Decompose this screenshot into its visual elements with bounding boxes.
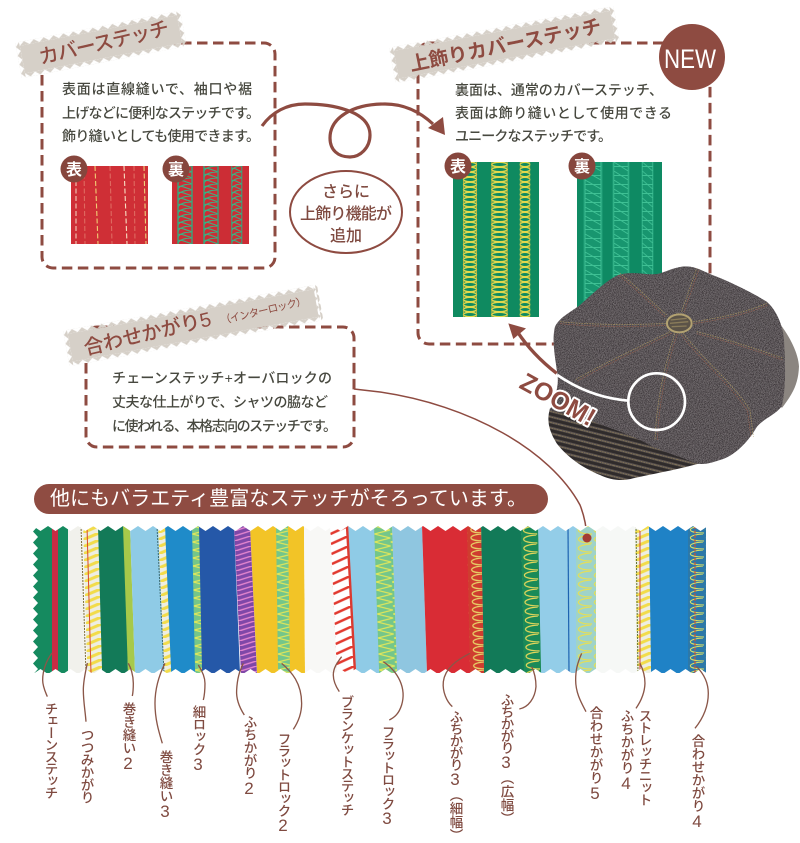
stitch labels: ふちかがり 3 （広幅） xyxy=(496,693,516,824)
description text: 飾り縫いとしても使用できます。 xyxy=(62,128,260,144)
stitch labels xyxy=(42,693,706,842)
panel border xyxy=(42,43,275,268)
zoom arrow xyxy=(508,323,557,373)
heading banner: decorative cover stitch xyxy=(389,6,620,83)
badge: back xyxy=(568,152,596,180)
stitch labels: フラットロック 3 xyxy=(378,725,396,826)
zoom indicator xyxy=(508,323,685,432)
panel: interlock stitch xyxy=(63,285,354,447)
badge: front: 表 xyxy=(66,161,82,179)
swatch: back xyxy=(577,162,662,317)
hat seams xyxy=(560,268,783,440)
pinked edges xyxy=(30,526,710,674)
stitch labels: 巻き縫い 3 xyxy=(156,749,174,820)
panel border xyxy=(86,327,354,447)
stitch labels: ふちかがり 4 xyxy=(616,709,636,792)
stitch labels: つつみかがり xyxy=(78,728,94,804)
callout: additional function: さらに xyxy=(322,183,370,201)
description text: 裏面は、通常のカバーステッチ、 xyxy=(455,82,663,98)
description text xyxy=(62,81,260,144)
description text: チェーンステッチ+オーバロックの xyxy=(112,370,332,386)
marker dot xyxy=(582,534,592,542)
stitch labels: フラットロック 2 xyxy=(274,732,292,834)
heading banner: interlock stitch xyxy=(63,285,323,366)
badge: back xyxy=(162,156,190,182)
stitch labels: チェーンステッチ xyxy=(42,702,58,800)
heading banner: cover stitch xyxy=(15,11,187,78)
description text: 表面は飾り縫いとして使用できる xyxy=(455,105,672,121)
description text xyxy=(112,370,337,434)
fabric panels xyxy=(33,526,706,673)
connector from panel to fabric sample xyxy=(354,389,587,538)
hat button xyxy=(667,314,692,332)
heading banner: cover stitch: カバーステッチ xyxy=(37,18,171,69)
swatch: front xyxy=(71,166,148,244)
heading banner: decorative cover stitch: 上飾りカバーステッチ xyxy=(408,15,603,76)
stitch labels: ふちかがり 3 （細幅） xyxy=(446,710,464,842)
swatch: front xyxy=(453,162,539,317)
section heading pill: 他にもバラエティ豊富なステッチがそろっています。 xyxy=(50,487,527,510)
badge: back: 裏 xyxy=(574,157,590,176)
heading banner: interlock stitch: （インターロック） xyxy=(219,295,308,327)
description text: 表面は直線縫いで、袖口や裾 xyxy=(62,81,252,97)
badge: front xyxy=(60,156,88,182)
heading banner: interlock stitch: 合わせかがり5 xyxy=(82,308,213,360)
stitch labels: 合わせかがり 5 xyxy=(586,706,604,802)
label leader lines, left group xyxy=(43,653,403,743)
description text: ユニークなステッチです。 xyxy=(455,128,612,144)
stitch labels: ストレッチニット xyxy=(636,709,652,806)
stitch rows xyxy=(52,526,706,673)
stitch labels: 合わせかがり 4 xyxy=(688,734,706,830)
hat brim xyxy=(548,408,717,480)
zoom label: ZOOM! xyxy=(515,368,600,432)
hat photo xyxy=(548,266,799,480)
callout: additional function: 上飾り機能が xyxy=(300,204,392,223)
description text: 丈夫な仕上がりで、シャツの脇など xyxy=(112,394,328,410)
swatch: back xyxy=(172,166,249,244)
panel: decorative cover stitch xyxy=(389,6,725,344)
badge: front xyxy=(444,152,472,180)
hat crown xyxy=(550,266,785,464)
badge: front: 表 xyxy=(450,158,466,176)
stitch labels: ふちかがり 2 xyxy=(240,715,258,797)
label leader lines, right group xyxy=(443,653,708,728)
description text: に使われる、本格志向のステッチです。 xyxy=(112,418,337,434)
fabric sample strip xyxy=(30,526,710,674)
description text xyxy=(455,82,672,144)
zoom ring and pointer xyxy=(557,373,685,430)
badge: NEW: NEW xyxy=(664,44,716,74)
callout: additional function: 追加 xyxy=(330,227,362,245)
stitch labels: 細ロック 3 xyxy=(188,704,208,773)
stitch labels: 巻き縫い 2 xyxy=(118,701,138,772)
badge: back: 裏 xyxy=(168,160,184,179)
panel: cover stitch xyxy=(15,11,275,268)
panel border xyxy=(418,43,710,344)
badge: NEW xyxy=(659,24,725,90)
hat side xyxy=(778,322,799,408)
callout: additional function xyxy=(290,171,402,253)
stitch labels: ブランケットステッチ xyxy=(338,695,354,817)
looping arrow xyxy=(262,104,445,157)
description text: 上げなどに便利なステッチです。 xyxy=(62,105,260,121)
section heading pill xyxy=(34,484,548,514)
